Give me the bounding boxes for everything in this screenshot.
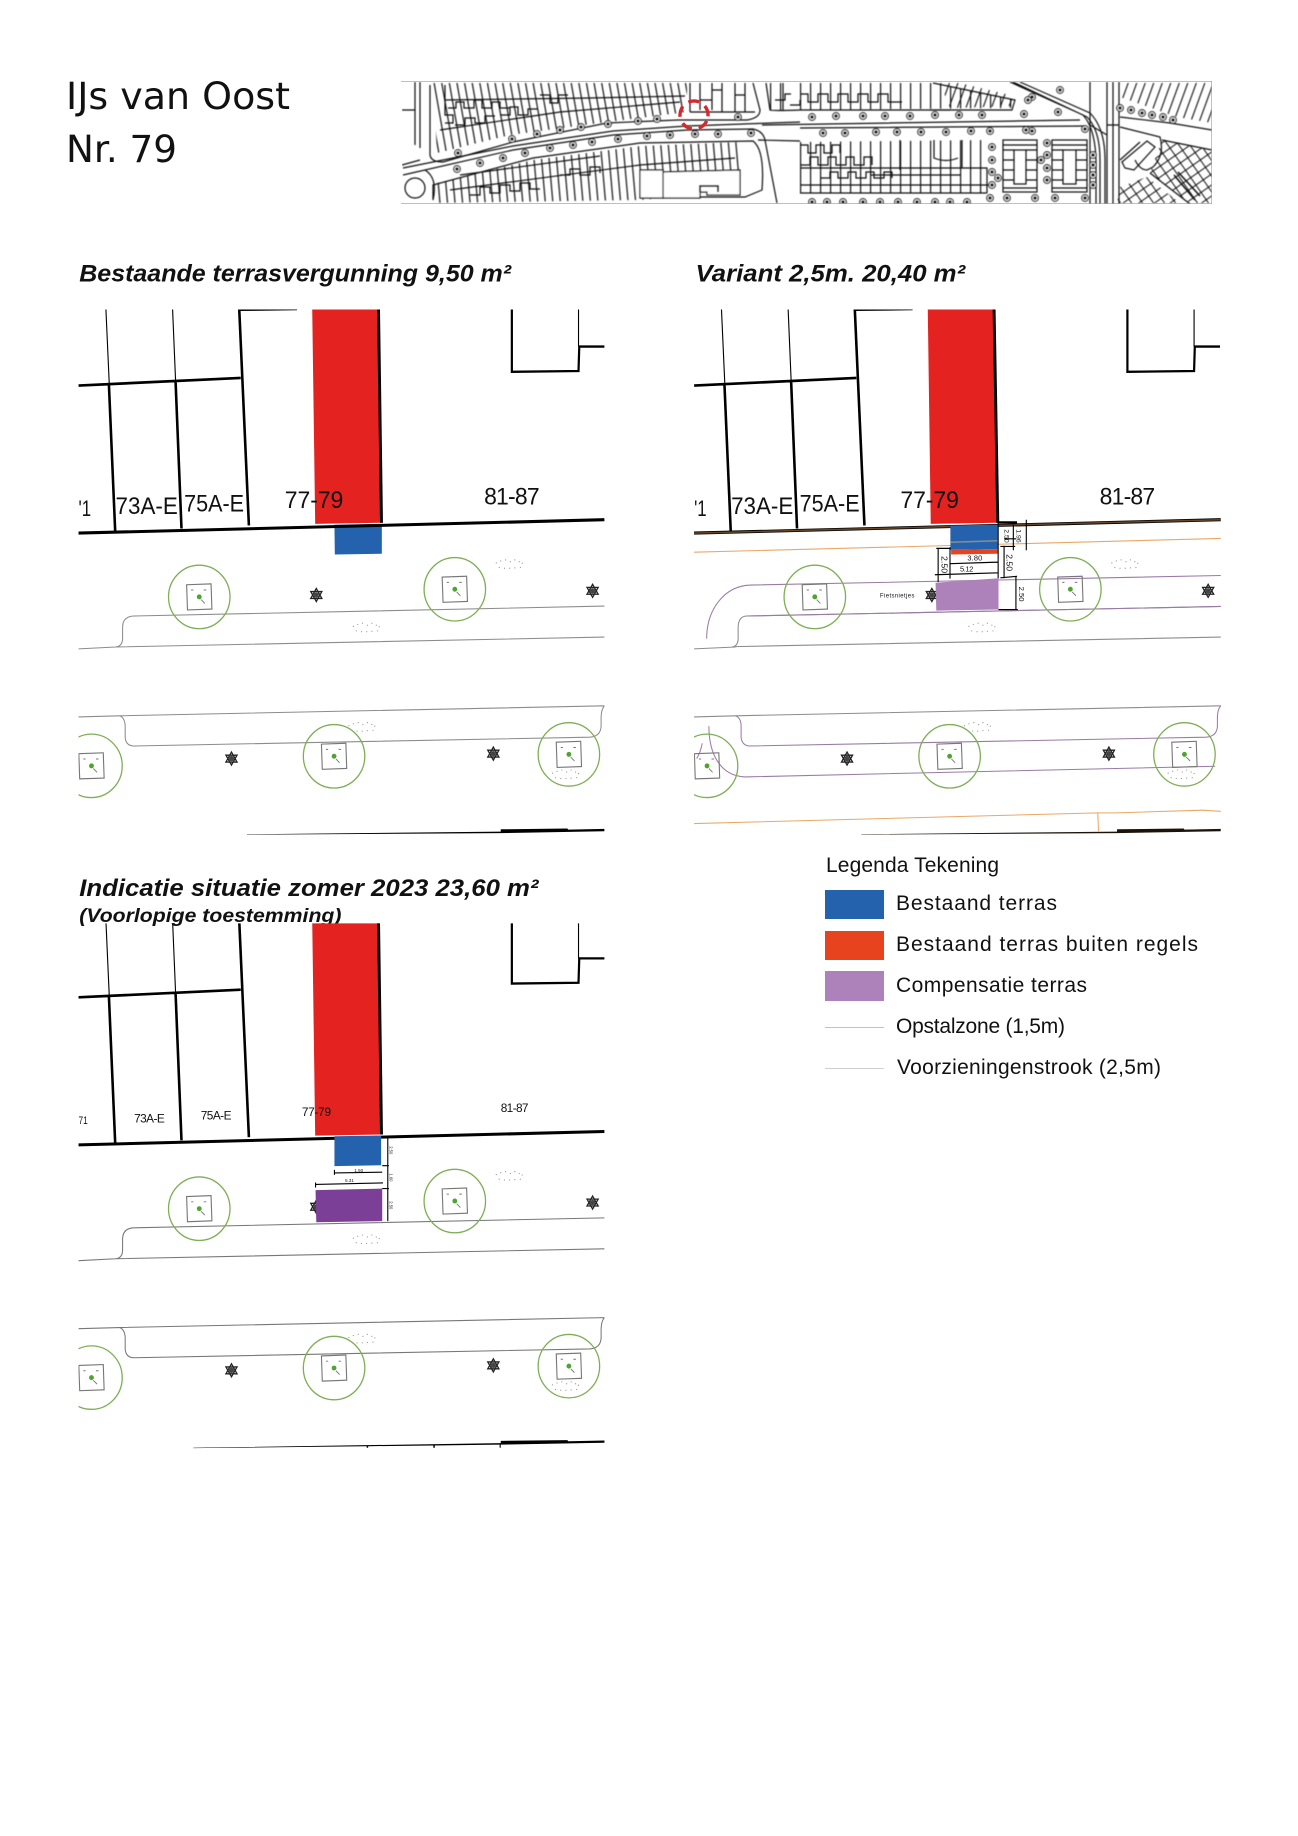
- blue terrace: [334, 524, 382, 554]
- dimension labels: 2.50: [1002, 529, 1009, 543]
- house numbers: [79, 1101, 529, 1127]
- dimension labels: 2.50: [388, 1146, 393, 1155]
- legend item: compensatie terras: [825, 971, 1087, 1001]
- page title: Nr. 79: [66, 128, 177, 171]
- purple compensation terrace: [936, 578, 999, 611]
- legend item: opstalzone: Opstalzone (1,5m): [896, 1015, 1065, 1038]
- house numbers: [79, 488, 538, 516]
- house numbers: 73A-E: [731, 493, 793, 519]
- panel: variant 2,5m: [676, 260, 1221, 835]
- dimension labels: 1.60: [388, 1173, 393, 1182]
- dimension labels: 5.31: [345, 1178, 354, 1183]
- location map: [401, 81, 1212, 205]
- road and zone lines: [694, 538, 1221, 831]
- house numbers: '1: [694, 496, 707, 521]
- red building zone: [312, 310, 382, 524]
- purple compensation terrace: [316, 1189, 382, 1222]
- bottom edge: [247, 829, 604, 835]
- heading: Variant 2,5m. 20,40 m²: [696, 260, 967, 287]
- house numbers: 71: [79, 1115, 88, 1127]
- house numbers: 81-87: [484, 483, 540, 510]
- legend item: compensatie terras: Compensatie terras: [896, 974, 1087, 997]
- legend item: bestaand terras buiten regels: Bestaand terras buiten regels: [896, 933, 1198, 956]
- house numbers: '1: [79, 496, 91, 521]
- dimension labels: 2.50: [1017, 587, 1026, 601]
- house numbers: [694, 483, 1155, 521]
- dimension labels: 2.50: [1005, 554, 1015, 571]
- dimension labels: 2.50: [940, 556, 949, 573]
- house numbers: 75A-E: [201, 1108, 231, 1122]
- legend item: bestaand terras buiten regels: [825, 931, 1198, 960]
- dimension labels: 1.50: [354, 1168, 364, 1173]
- house numbers: 81-87: [501, 1101, 529, 1115]
- orange terrace outside rules: [951, 549, 998, 554]
- dimension labels: 5.12: [960, 564, 973, 573]
- house numbers: 77-79: [285, 487, 343, 513]
- legend item: bestaand terras: [825, 890, 1057, 919]
- legend title: Legenda Tekening: [826, 854, 999, 877]
- page title: IJs van Oost: [66, 75, 290, 118]
- bottom edge: [193, 1440, 604, 1448]
- page title: [66, 75, 290, 171]
- dimension labels: 2.50: [388, 1201, 393, 1210]
- blue terrace: [334, 1135, 381, 1166]
- house numbers: 77-79: [900, 487, 959, 513]
- drawing: [61, 310, 604, 835]
- facade line: [694, 520, 1221, 533]
- house numbers: 77-79: [302, 1105, 331, 1119]
- dimension lines: [935, 520, 1026, 610]
- drawing: [61, 921, 604, 1409]
- drawing: [694, 310, 1220, 531]
- legend item: bestaand terras: Bestaand terras: [896, 892, 1057, 915]
- blue terrace: [950, 525, 998, 550]
- dimension labels: [880, 529, 1026, 601]
- legend: [825, 854, 1198, 1079]
- location marker: [678, 99, 710, 130]
- plot boundaries: [79, 310, 604, 531]
- house numbers: 81-87: [1100, 483, 1155, 510]
- heading: Indicatie situatie zomer 2023 23,60 m²: [79, 875, 540, 901]
- panel: bestaande terrasvergunning: [61, 260, 604, 835]
- house numbers: 73A-E: [116, 493, 178, 519]
- subheading: (Voorlopige toestemming): [79, 906, 341, 927]
- dimension labels: 3.80: [967, 553, 982, 563]
- panel: indicatie situatie zomer 2023: [61, 875, 604, 1448]
- trees and posts: [61, 558, 600, 798]
- dimension labels: [345, 1146, 393, 1210]
- house numbers: 75A-E: [184, 490, 244, 517]
- facade line: [79, 520, 604, 533]
- house numbers: 75A-E: [800, 490, 860, 517]
- dimension labels: 1.96: [1014, 529, 1021, 543]
- bottom edge: [861, 829, 1221, 835]
- house numbers: 73A-E: [134, 1111, 165, 1126]
- heading: Bestaande terrasvergunning 9,50 m²: [79, 260, 512, 287]
- road lines: [79, 606, 604, 746]
- dimension lines: [316, 1136, 389, 1221]
- trees and posts: [676, 558, 1215, 798]
- dimension labels: Fietsnietjes: [880, 593, 914, 599]
- legend item: voorzieningenstrook: Voorzieningenstrook (2,5m): [897, 1056, 1161, 1079]
